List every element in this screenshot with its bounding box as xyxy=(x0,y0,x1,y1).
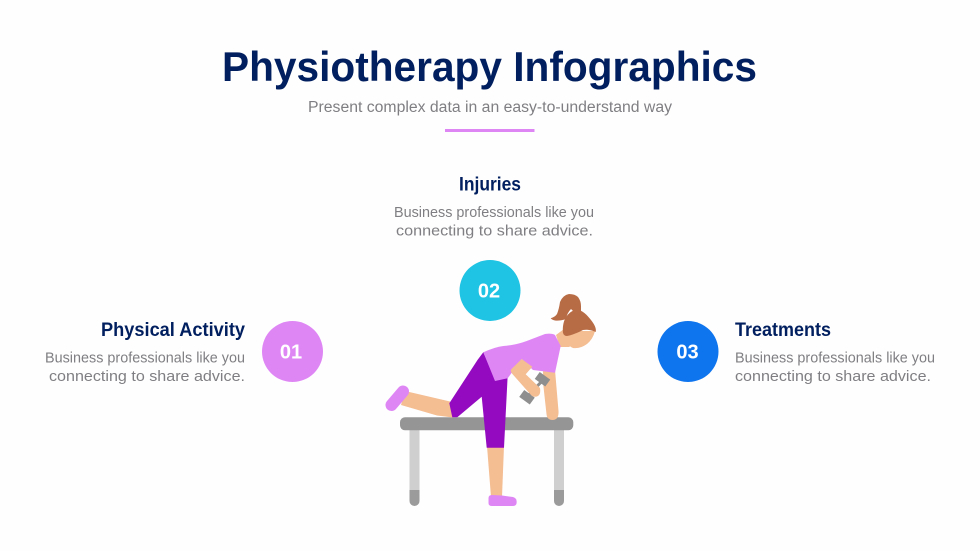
bench xyxy=(400,417,573,506)
title underline xyxy=(445,129,534,132)
heading: injuries: Injuries xyxy=(459,174,521,196)
dumbbell xyxy=(519,372,550,405)
badge 01 xyxy=(262,321,323,382)
badge 02 xyxy=(460,260,520,321)
heading: treatments: Treatments xyxy=(735,320,831,341)
subtitle: Present complex data in an easy-to-understand way xyxy=(308,99,672,116)
text: injuries description: Business professionals like you xyxy=(394,204,594,221)
leggings xyxy=(449,352,508,448)
badge 03: 03 xyxy=(676,342,699,364)
text: treatments description: Business professionals like you xyxy=(735,350,935,366)
raised leg xyxy=(401,391,453,418)
text: physical activity description: Business professionals like you xyxy=(45,350,245,366)
text: physical activity description xyxy=(45,350,245,385)
hair xyxy=(563,310,596,336)
standing leg xyxy=(487,446,504,497)
raised foot shoe xyxy=(392,392,403,405)
badge 02: 02 xyxy=(478,280,500,302)
shirt xyxy=(483,334,561,381)
text: physical activity description: connecting to share advice. xyxy=(49,368,245,385)
ponytail xyxy=(551,294,581,321)
title: Physiotherapy Infographics xyxy=(222,43,757,90)
panel: treatments xyxy=(735,320,935,385)
heading: physical activity: Physical Activity xyxy=(101,320,245,341)
illustration: woman exercising on bench xyxy=(392,294,596,506)
panel: physical activity xyxy=(45,320,245,385)
neck xyxy=(556,329,580,347)
text: treatments description xyxy=(735,350,935,385)
text: injuries description xyxy=(394,204,594,240)
text: injuries description: connecting to share advice. xyxy=(396,222,593,240)
badge 01: 01 xyxy=(280,342,302,364)
badge 03 xyxy=(658,321,718,382)
face xyxy=(564,331,595,348)
panel: injuries xyxy=(394,174,594,240)
text: treatments description: connecting to share advice. xyxy=(735,368,931,385)
standing foot shoe xyxy=(488,495,517,506)
support arm xyxy=(543,370,559,420)
bent arm xyxy=(511,359,540,397)
